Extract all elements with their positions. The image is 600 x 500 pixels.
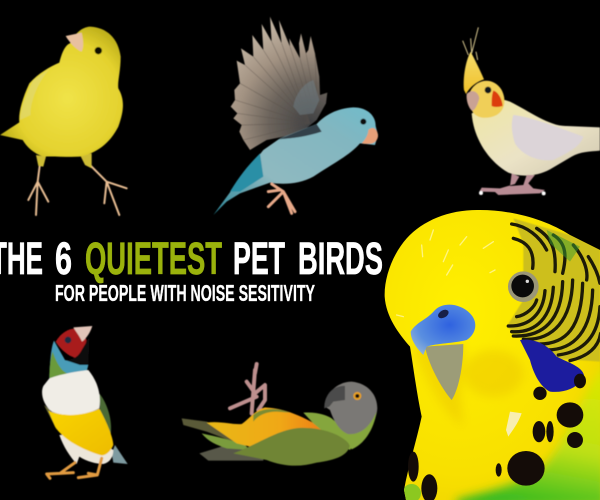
finch lower body [59,433,113,464]
budgie green chest [457,363,600,500]
title: PET: PET [233,233,285,284]
cockatiel crest plumes [463,27,478,60]
finch red head [56,328,87,359]
budgie white feather [506,412,522,437]
finch black throat [65,337,89,365]
senegal wing [233,428,350,466]
cockatiel feet [479,173,545,195]
senegal lower tail [199,446,263,461]
budgie blue cheek patch [520,340,584,392]
parrotlet beak [362,128,378,144]
senegal green breast [303,412,357,450]
cockatiel perch highlights [479,191,483,195]
canary thighs [36,153,92,168]
parrotlet feet [268,184,295,213]
finch green wing [99,393,111,435]
senegal green flank [253,409,290,422]
parrotlet eye [360,119,366,125]
cockatiel body [472,100,600,176]
budgie nape stripes base [507,218,600,362]
title: QUIETEST: QUIETEST [85,233,222,284]
budgie cere [411,305,475,355]
budgie beak lower [425,344,463,400]
finch blue neck [49,341,88,378]
senegal neck green [343,412,377,449]
parrotlet tail marking [230,153,263,192]
budgie feather strokes [397,230,495,317]
budgie black bars [508,224,600,361]
finch left wing edge [44,405,57,430]
canary wing highlight [20,68,50,120]
finch white chest [42,370,100,415]
parrotlet wing coverts [293,80,319,115]
finch eye [65,337,71,343]
cockatiel perch highlight [542,191,546,195]
budgie eye [508,271,539,302]
senegal foot [230,364,265,413]
bird: blue parrotlet in flight [213,17,378,215]
canary beak [66,33,83,52]
canary legs [28,163,127,215]
cockatiel beak [467,91,479,111]
parrotlet body [213,107,378,215]
senegal green under tail [202,433,250,450]
title: 6: 6 [55,233,72,284]
cockatiel cheek [492,91,503,107]
cockatiel crest [464,52,484,94]
title [0,233,383,284]
parrotlet feather lines [235,42,317,140]
bird: gouldian finch [42,326,128,478]
cockatiel wing [512,115,583,160]
bird: cockatiel [463,27,600,195]
finch legs [47,458,102,478]
bird: yellow canary [0,27,127,215]
parrotlet wing [231,17,327,150]
budgie golden shading [416,343,523,420]
canary eye [95,47,102,54]
senegal belly [207,407,328,447]
canary body [0,27,123,157]
budgie silhouette [385,210,600,500]
senegal head [325,382,377,435]
bird: senegal parrot on its back [182,364,377,466]
senegal beak [324,386,345,408]
parrotlet neck shade [278,124,322,139]
title: BIRDS: BIRDS [298,233,383,284]
finch tail [112,445,128,464]
subtitle: FOR PEOPLE WITH NOISE SESITIVITY [55,280,315,306]
bird: budgerigar close-up [385,210,600,500]
cockatiel head [470,81,504,118]
budgie throat spots [408,374,586,500]
finch green nape [49,352,68,378]
finch yellow belly [48,409,113,455]
budgie green nape tint [547,230,580,262]
budgie nostril [437,308,450,320]
cockatiel eye [485,87,491,93]
senegal tail [182,418,242,445]
finch beak [73,326,92,342]
senegal eye [353,392,361,400]
budgie green lower-left [402,484,421,500]
